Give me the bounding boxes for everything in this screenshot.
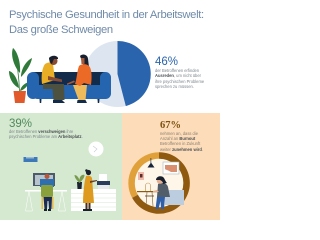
stat: 46%: der Betroffenen erfinden — [155, 68, 199, 73]
stat: 67%: Anzahl an Burnout — [160, 136, 195, 141]
stat: 46%: Ausreden, um nicht über — [155, 73, 201, 78]
stat: 46%: ihre psychischen Probleme — [155, 79, 204, 84]
stat: 46%: 46% — [155, 56, 178, 68]
illustration: copier — [97, 174, 110, 189]
stat: 39%: der Betroffenen verschweigen ihre — [9, 128, 73, 134]
title: Psychische Gesundheit in der Arbeitswelt: — [9, 9, 204, 21]
stat: 46%: sprechen zu müssen. — [155, 84, 194, 89]
woman — [67, 55, 92, 103]
man — [42, 56, 65, 103]
stat: 39%: psychischen Probleme am Arbeitsplatz. — [9, 134, 83, 139]
title: Das große Schweigen — [9, 24, 113, 36]
stat: 67%: nehmen an, dass die — [160, 130, 198, 136]
title — [9, 9, 204, 36]
stat: 46% — [155, 56, 204, 89]
stat: 67%: 67% — [160, 120, 181, 131]
illustration: cabinet — [71, 189, 116, 211]
panel: green background — [0, 112, 122, 220]
sofa — [27, 72, 111, 103]
illustration and charts — [9, 41, 190, 214]
illustration: wall clock — [88, 142, 104, 156]
stat: 39%: 39% — [9, 118, 32, 130]
illustration: standing woman — [83, 169, 97, 211]
illustration: desk and worker — [25, 173, 67, 211]
illustration: shelf — [24, 157, 38, 162]
stat: 67% — [160, 120, 203, 152]
illustration: plant on cabinet — [74, 175, 84, 189]
stat: 67%: Betroffenen in Zukunft — [160, 141, 200, 146]
stat: 67%: weiter zunehmen wird. — [160, 147, 203, 152]
donut chart: 67% with cafe scene — [131, 155, 187, 211]
pie chart: 46% — [84, 41, 151, 107]
icon: plant — [9, 48, 32, 103]
panel: peach background — [122, 112, 220, 220]
stat: 39% — [9, 118, 83, 139]
